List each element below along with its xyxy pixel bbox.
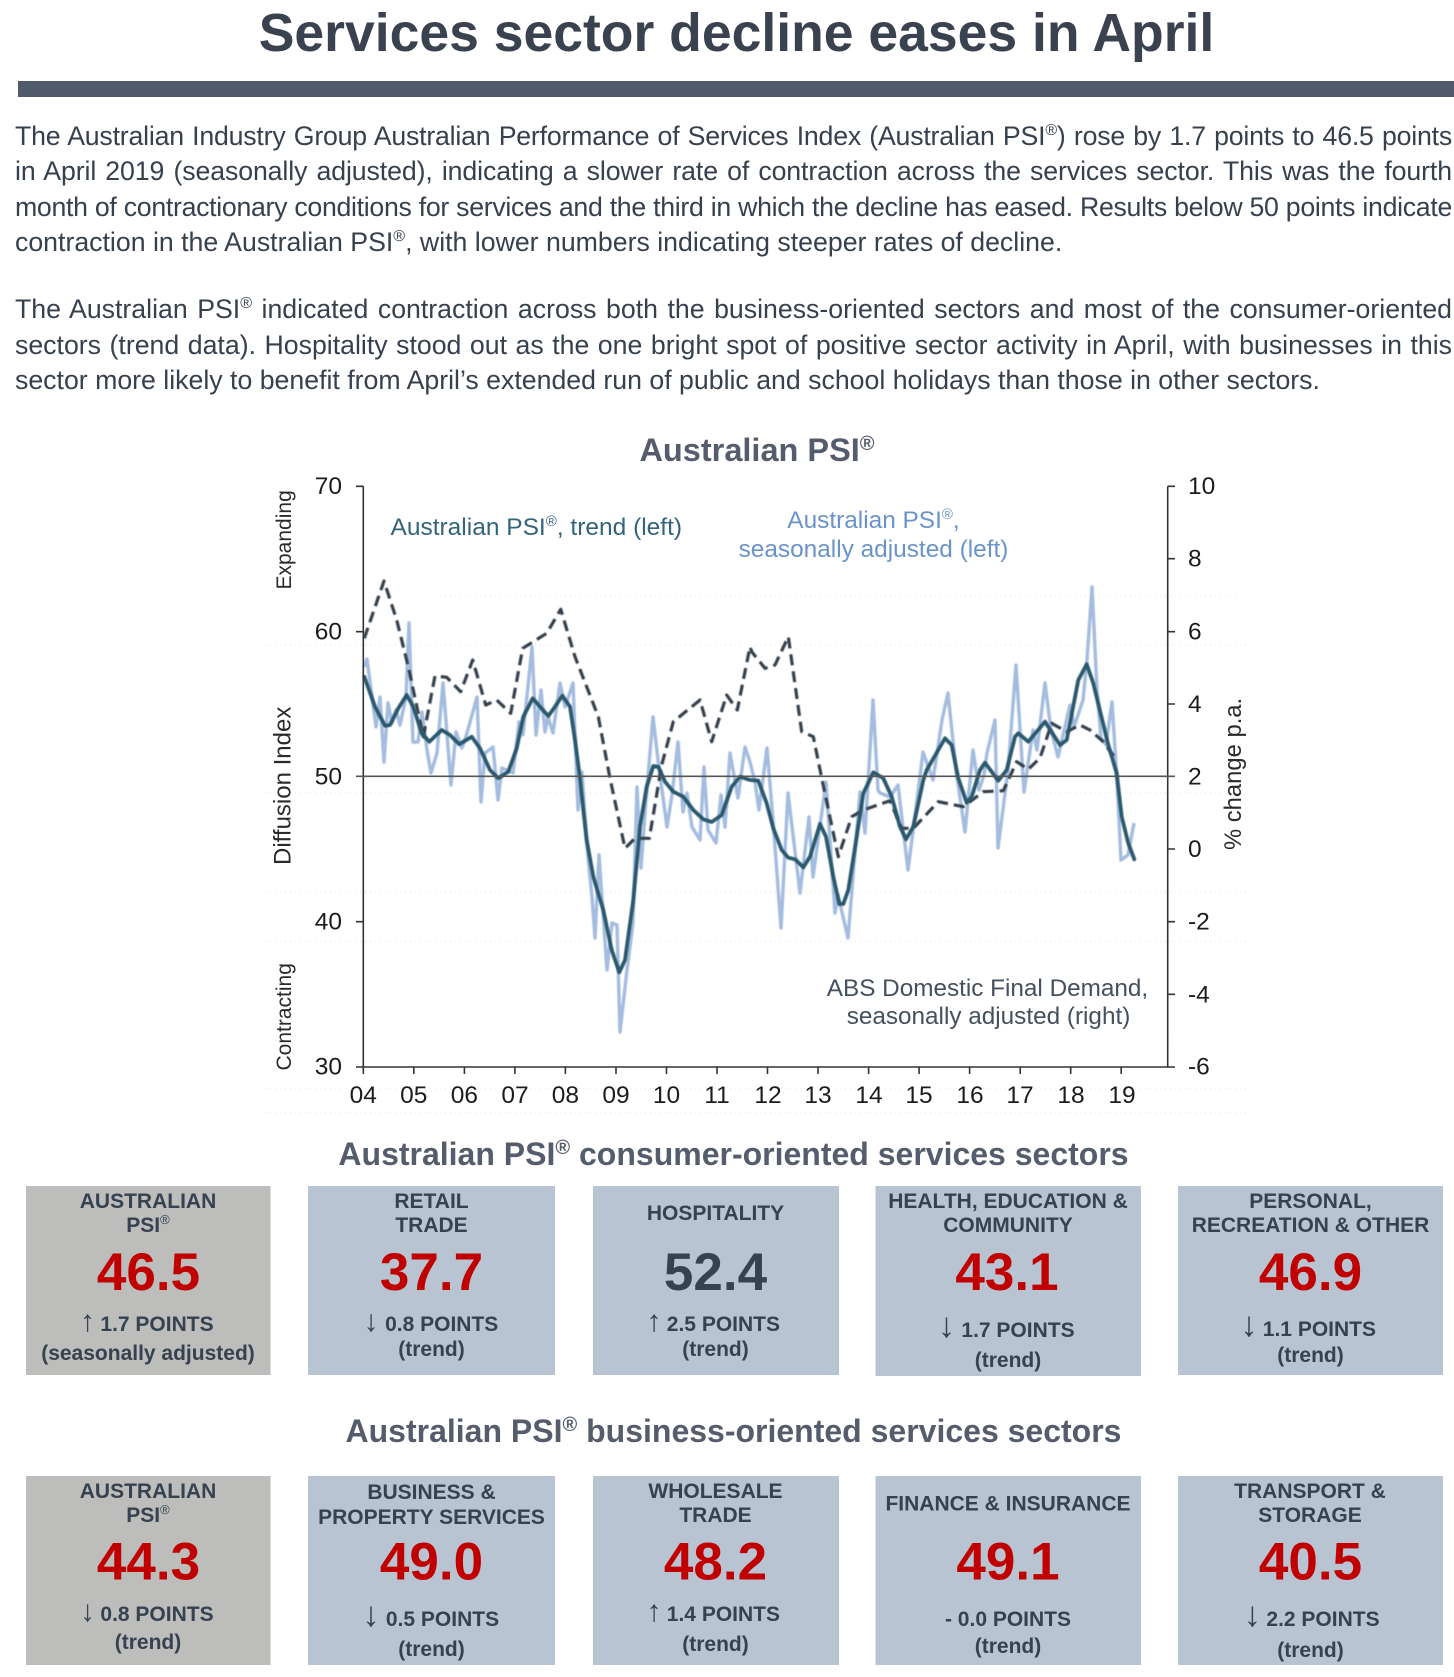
series label: trend: , trend (left) <box>557 514 682 541</box>
panel: finance and insurance <box>876 1476 1141 1665</box>
text block: intro paragraph one: in April 2019 (seasonally adjusted), indicating a slower rate of contraction across the services sector. This was the fourth <box>15 156 1452 186</box>
axis title: Expanding: Expanding <box>273 490 296 590</box>
panel: business and property services <box>308 1476 555 1665</box>
x axis year labels: 11 <box>704 1082 730 1109</box>
panel: health, education and community: 43.1 <box>955 1243 1059 1302</box>
text block: intro paragraph two <box>15 294 1452 395</box>
right axis labels: 6 <box>1188 618 1202 646</box>
panel: transport and storage: ↓ <box>1244 1595 1261 1634</box>
panel: business Australian PSI: 44.3 <box>97 1532 200 1592</box>
series label: seasonally adjusted: , <box>953 507 960 534</box>
panel: hospitality: (trend) <box>682 1338 749 1361</box>
text block: intro paragraph one: contraction in the Australian PSI®, with lower numbers indicating steeper rates of decline. <box>15 227 1062 257</box>
panel: wholesale trade <box>593 1476 839 1665</box>
panel: wholesale trade: ↑ <box>646 1595 662 1628</box>
right axis labels: 0 <box>1188 836 1202 863</box>
right axis labels: -2 <box>1188 908 1210 936</box>
panel: business and property services: 0.5 POINTS <box>386 1608 499 1631</box>
panel: hospitality: HOSPITALITY <box>647 1202 784 1225</box>
x axis year labels: 18 <box>1057 1082 1085 1109</box>
left axis labels: 70 <box>315 473 342 500</box>
series label: trend: ® <box>546 513 557 530</box>
panel: business Australian PSI: (trend) <box>115 1631 181 1654</box>
panel: personal, recreation and other: ↓ <box>1240 1305 1258 1344</box>
text block: intro paragraph two: sector more likely to benefit from April’s extended run of public and school holidays than those in other sectors. <box>15 365 1320 395</box>
x axis year labels: 04 <box>350 1082 377 1109</box>
panel: personal, recreation and other: (trend) <box>1277 1344 1344 1367</box>
left axis labels <box>315 473 342 1080</box>
panel: retail trade: 0.8 POINTS <box>385 1313 498 1336</box>
panel: hospitality <box>593 1186 839 1375</box>
right axis labels: 8 <box>1188 546 1202 572</box>
panel: personal, recreation and other: PERSONAL, <box>1249 1190 1372 1213</box>
panel: transport and storage: 40.5 <box>1259 1532 1362 1592</box>
left axis labels: 40 <box>315 908 342 936</box>
panel: consumer Australian PSI: 1.7 POINTS <box>100 1313 214 1336</box>
right axis labels: 2 <box>1188 764 1202 790</box>
panel: personal, recreation and other <box>1178 1186 1443 1375</box>
panel: wholesale trade: WHOLESALE <box>648 1480 783 1503</box>
right axis labels <box>1188 473 1215 1080</box>
series label: ABS demand <box>827 975 1148 1030</box>
heading: consumer-oriented sectors: Australian PSI <box>338 1136 555 1172</box>
x axis year labels: 15 <box>905 1082 933 1109</box>
panel: transport and storage: 2.2 POINTS <box>1266 1608 1380 1631</box>
x axis year labels: 19 <box>1108 1082 1136 1109</box>
panel: business Australian PSI: 0.8 POINTS <box>100 1603 214 1626</box>
axis title: percent change: % change p.a. <box>1220 698 1247 850</box>
x axis year labels: 16 <box>956 1082 984 1109</box>
chart title: Australian PSI <box>639 432 860 468</box>
panel: business Australian PSI: ↓ <box>80 1595 95 1628</box>
series: seasonally adjusted PSI <box>364 587 1134 1032</box>
heading: consumer-oriented sectors: consumer-oriented services sectors <box>570 1136 1129 1172</box>
x axis year labels: 07 <box>501 1082 529 1109</box>
panel: health, education and community: COMMUNITY <box>943 1214 1073 1237</box>
panel: retail trade: RETAIL <box>394 1190 469 1213</box>
panel: transport and storage: TRANSPORT & <box>1234 1480 1386 1503</box>
series: PSI trend <box>364 664 1134 972</box>
series label: ABS demand: ABS Domestic Final Demand, <box>827 975 1148 1002</box>
heading: business-oriented sectors: Australian PSI <box>346 1413 562 1449</box>
right axis labels: 4 <box>1188 691 1202 718</box>
panel: health, education and community: ↓ <box>938 1306 955 1345</box>
chart title: ® <box>860 433 875 455</box>
panel: retail trade <box>308 1186 555 1375</box>
panel: consumer Australian PSI: ® <box>160 1212 170 1227</box>
series label: seasonally adjusted <box>739 506 1008 563</box>
axis title: Contracting: Contracting <box>273 963 296 1070</box>
panel: business Australian PSI: AUSTRALIAN <box>80 1480 216 1503</box>
panel: consumer Australian PSI <box>26 1186 270 1375</box>
panel: retail trade: TRADE <box>395 1214 468 1237</box>
panel: consumer Australian PSI: PSI <box>126 1214 160 1237</box>
heading: business-oriented sectors: ® <box>562 1414 577 1436</box>
panel: retail trade: (trend) <box>398 1338 465 1361</box>
x axis year labels: 14 <box>855 1082 883 1109</box>
series label: seasonally adjusted: seasonally adjusted (left) <box>739 536 1008 563</box>
text block: intro paragraph two: sectors (trend data). Hospitality stood out as the one bright spot of positive sector activity in April, with businesses in this <box>15 330 1452 360</box>
panel: retail trade: ↓ <box>364 1305 378 1338</box>
panel: personal, recreation and other: 46.9 <box>1259 1243 1362 1302</box>
heading: consumer-oriented sectors: ® <box>555 1137 570 1159</box>
panel: business and property services: (trend) <box>398 1638 465 1661</box>
panel: retail trade: 37.7 <box>380 1243 483 1302</box>
axis title: Diffusion Index: Diffusion Index <box>270 707 296 865</box>
series label: seasonally adjusted: ® <box>942 506 953 523</box>
panel: hospitality: 52.4 <box>664 1243 768 1302</box>
series label: ABS demand: seasonally adjusted (right) <box>847 1003 1130 1030</box>
panel: business and property services: 49.0 <box>380 1532 483 1592</box>
panel: finance and insurance: - 0.0 POINTS <box>945 1608 1071 1631</box>
x axis year labels: 06 <box>451 1082 478 1109</box>
panel: business Australian PSI <box>26 1476 270 1665</box>
series: ABS domestic final demand <box>364 581 1117 857</box>
series label: seasonally adjusted: Australian PSI <box>787 507 942 534</box>
panel: business and property services: PROPERTY SERVICES <box>318 1506 545 1529</box>
panel: business and property services: ↓ <box>362 1595 380 1634</box>
panel: hospitality: 2.5 POINTS <box>667 1313 780 1336</box>
right axis labels: -4 <box>1188 982 1210 1008</box>
text block: intro paragraph one: The Australian Industry Group Australian Performance of Services Index (Australian PSI®) rose by 1.7 points to 46.5 points <box>15 120 1452 150</box>
panel: business and property services: BUSINESS & <box>367 1481 496 1504</box>
title: Services sector decline eases in April <box>259 4 1214 63</box>
panel: business Australian PSI: PSI <box>126 1504 160 1527</box>
panel: consumer Australian PSI: AUSTRALIAN <box>80 1190 216 1213</box>
panel: health, education and community <box>876 1186 1141 1376</box>
heading: business-oriented sectors: business-oriented services sectors <box>577 1413 1121 1449</box>
panel: finance and insurance: (trend) <box>975 1635 1041 1658</box>
text block: intro paragraph two: The Australian PSI® indicated contraction across both the business-oriented sectors and most of the consumer-oriented <box>15 294 1452 324</box>
x axis year labels: 13 <box>804 1082 832 1109</box>
panel: health, education and community: 1.7 POINTS <box>961 1319 1075 1342</box>
left axis labels: 50 <box>315 764 342 790</box>
x axis year labels <box>350 1082 1136 1109</box>
left axis labels: 60 <box>315 618 342 646</box>
header rule <box>18 81 1454 97</box>
panel: personal, recreation and other: RECREATION & OTHER <box>1192 1214 1429 1237</box>
axes and ticks <box>356 486 1175 1074</box>
panel: finance and insurance: 49.1 <box>956 1532 1060 1592</box>
left axis labels: 30 <box>315 1054 342 1080</box>
text block: intro paragraph one <box>15 120 1452 257</box>
x axis year labels: 09 <box>602 1082 630 1109</box>
x axis year labels: 05 <box>400 1082 427 1109</box>
panel: finance and insurance: FINANCE & INSURANCE <box>885 1492 1131 1516</box>
panel: transport and storage: STORAGE <box>1258 1504 1362 1527</box>
panel: business Australian PSI: ® <box>160 1502 170 1517</box>
x axis year labels: 10 <box>653 1082 680 1109</box>
panel: transport and storage <box>1178 1476 1443 1665</box>
series label: trend: Australian PSI <box>390 514 546 541</box>
panel: wholesale trade: TRADE <box>679 1504 752 1527</box>
panel: consumer Australian PSI: 46.5 <box>97 1243 200 1302</box>
right axis labels: 10 <box>1188 473 1215 500</box>
panel: wholesale trade: 1.4 POINTS <box>667 1603 780 1626</box>
x axis year labels: 08 <box>552 1082 579 1109</box>
panel: health, education and community: (trend) <box>975 1349 1041 1372</box>
x axis year labels: 17 <box>1006 1082 1034 1109</box>
x axis year labels: 12 <box>754 1082 782 1109</box>
panel: wholesale trade: 48.2 <box>664 1532 767 1592</box>
panel: consumer Australian PSI: (seasonally adjusted) <box>41 1342 255 1365</box>
panel: consumer Australian PSI: ↑ <box>80 1305 95 1338</box>
panel: health, education and community: HEALTH, EDUCATION & <box>888 1190 1128 1213</box>
panel: transport and storage: (trend) <box>1277 1639 1344 1662</box>
panel: personal, recreation and other: 1.1 POINTS <box>1263 1318 1376 1341</box>
panel: hospitality: ↑ <box>646 1305 662 1338</box>
panel: wholesale trade: (trend) <box>682 1633 749 1656</box>
text block: intro paragraph one: month of contractionary conditions for services and the third in which the decline has eased. Results below 50 points indicate <box>15 192 1452 222</box>
line chart: Australian PSI <box>265 473 1248 1113</box>
right axis labels: -6 <box>1188 1054 1210 1080</box>
